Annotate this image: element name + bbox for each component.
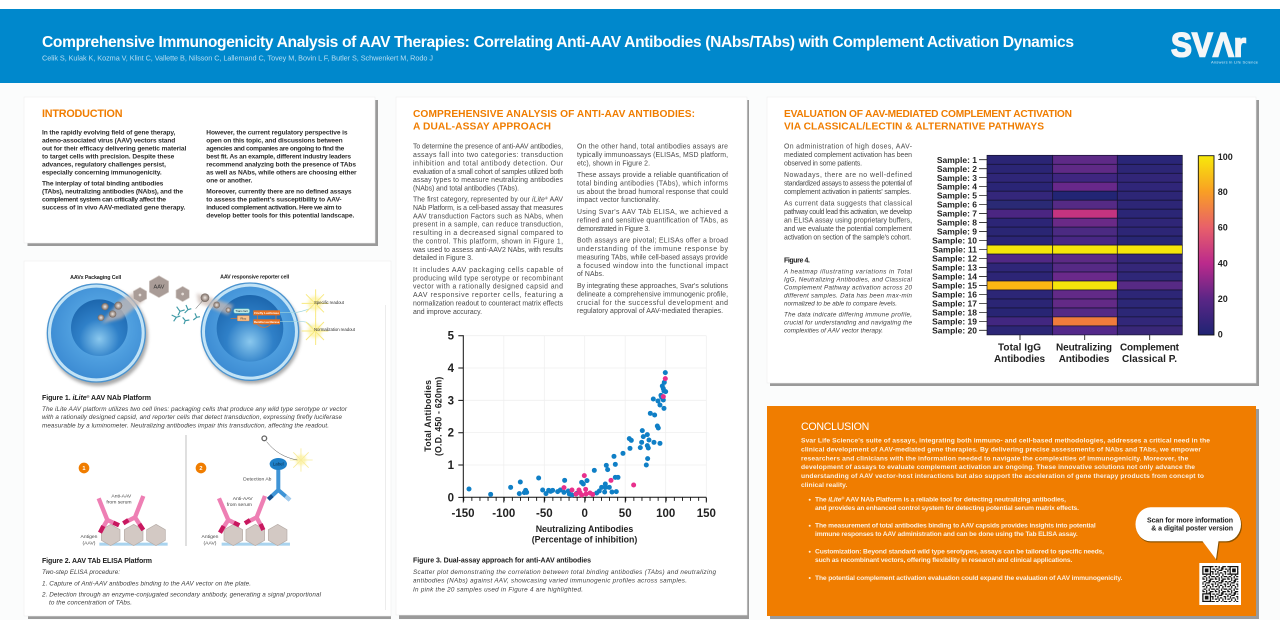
text block: introduction right column: Moreover, currently there are no defined assays: [206, 188, 352, 195]
text block: column 2: etc), shown in Figure 2.: [577, 160, 650, 168]
text block: column 1: NAb Platform, is a cell-based assay that measures: [413, 205, 564, 212]
text block: column 1: assays fall into two categories: transduction: [413, 152, 563, 159]
text block: complement activation: pathway could lead this activation, we develop: [784, 209, 912, 216]
text block: column 2: total binding antibodies (TAbs), which informs: [577, 180, 729, 188]
colour scale: 80: [1218, 187, 1228, 197]
text block: column 1: producing wild type serotype or recombinant: [413, 275, 563, 282]
reporter gene boxes: Trans fact: [235, 309, 248, 313]
heatmap column labels: [994, 343, 1180, 365]
figure 2 caption: Figure 2. AAV TAb ELISA Platform: [42, 558, 152, 565]
heading: complement activation: VIA CLASSICAL/LECTIN & ALTERNATIVE PATHWAYS: [784, 122, 1044, 133]
panel: conclusion: [767, 406, 1259, 619]
text block: introduction left column: success of in vivo AAV-mediated gene therapy.: [42, 204, 185, 211]
text block: column 1: normalization readout to counteract matrix effects: [413, 300, 564, 308]
bullet list: conclusion points: The iLite: [815, 497, 841, 504]
text block: introduction right column: recommend analyzing both the presence of TAbs: [206, 162, 356, 168]
step 1: capture: Antigen: [81, 534, 98, 540]
figure 2 caption: to the concentration of TAbs.: [49, 600, 132, 607]
text block: column 2: typically immunoassays (ELISAs, MSD platform,: [577, 152, 728, 159]
light readouts: Specific readout: [314, 300, 345, 305]
reporter gene boxes: Rluc: [240, 316, 247, 320]
heading: dual-assay approach: A DUAL-ASSAY APPROACH: [413, 122, 551, 132]
light readouts: [302, 289, 356, 345]
scatter tick labels: 50: [619, 508, 632, 520]
heatmap cells: [987, 155, 1182, 335]
heatmap sample labels: Sample: 11: [933, 245, 977, 255]
text block: column 2: impact vector functionality.: [577, 197, 660, 204]
text block: complement activation: observed in some patients.: [784, 160, 862, 168]
scatter tick labels: 3: [448, 395, 454, 407]
text block: column 1: was used to assess anti-AAV2 NAbs, with results: [412, 247, 564, 254]
scatter tick labels: 4: [448, 363, 455, 375]
bullet list: conclusion points: and provides an enhanced control system for detecting potential serum matrix effects.: [815, 505, 1079, 512]
figure 1 caption: AAV NAb Platform: [89, 395, 151, 402]
heatmap sample labels: Sample: 16: [932, 290, 977, 300]
scatter tick labels: [448, 331, 716, 520]
scatter points: [466, 370, 668, 497]
scatter tick labels: 0: [581, 508, 588, 520]
text block: column 2: measuring TAbs, while cell-based assays provide: [577, 254, 728, 262]
colour scale: 100: [1218, 152, 1233, 162]
bullet list: conclusion points: immune responses to AAV administration and can be done using the Tab ELISA assay.: [815, 531, 1078, 538]
text block: introduction right column: to assess the patient's susceptibility to AAV-: [206, 196, 342, 203]
text block: conclusion summary: Svar Life Science's suite of assays, integrating both immuno- and cell-based methodologies, addresses a critical need in the: [801, 438, 1210, 445]
figure 4 caption: different samples. Data has been max-min: [784, 292, 912, 299]
text block: column 1: and improve accuracy.: [413, 309, 482, 316]
text block: introduction left column: especially concerning immunogenicity.: [42, 170, 162, 176]
figure 2 caption: Two-step ELISA procedure:: [42, 569, 120, 576]
heading: complement activation: EVALUATION OF AAV-MEDIATED COMPLEMENT ACTIVATION: [784, 109, 1072, 120]
heatmap sample labels: Sample: 8: [937, 218, 977, 228]
text block: column 2: demonstrated in Figure 3.: [577, 226, 650, 233]
AAV vector particles travelling between cells: AAV: [154, 285, 165, 291]
text block: introduction left column: out for their efficacy delivering genetic material: [42, 146, 186, 152]
text block: column 1: inhibition and total antibody detection. Our: [413, 160, 564, 168]
text block: introduction right column: agencies and companies are ongoing to find the: [206, 146, 345, 152]
heatmap sample labels: Sample: 3: [937, 173, 977, 183]
panel: introduction: [24, 97, 378, 246]
text block: complement activation: As current data suggests that classical: [784, 201, 912, 208]
figure 2 illustration: AAV TAb ELISA platform: [79, 436, 313, 546]
heatmap sample labels: Sample: 15: [932, 280, 977, 290]
text block: introduction left column: adeno-associated virus (AAV) vectors stand: [42, 138, 175, 144]
text block: column 2: understanding of the immune response by: [577, 246, 729, 253]
scatter axes: [461, 335, 707, 500]
step 1: capture: [79, 463, 168, 546]
text block: conclusion summary: understanding of AAV vector-host interactions but also support the acceleration of gene therapy products from concept to: [801, 473, 1204, 480]
text block: complement activation: On administration of high doses, AAV-: [784, 144, 912, 150]
callout: scan for more information: & a digital poster version: [1151, 526, 1233, 533]
heatmap sample labels: Sample: 10: [932, 236, 977, 246]
text block: introduction right column: one or another.: [206, 178, 252, 184]
heatmap sample labels: Sample: 18: [932, 308, 977, 318]
text block: introduction right column: as well as NAbs, while others are choosing either: [206, 170, 357, 176]
heatmap sample labels: Sample: 5: [937, 191, 977, 201]
text block: column 1: evaluation of a small cohort of samples utilized both: [413, 169, 563, 176]
figure 3 caption: In pink the 20 samples used in Figure 4 are highlighted.: [413, 587, 583, 594]
heading: dual-assay approach: [413, 109, 695, 132]
heading: complement activation: [784, 109, 1072, 133]
text block: conclusion summary: development of assays to evaluate complement activation are ongoing. These innovative solutions not only advance the: [801, 464, 1195, 471]
text block: column 1: The first category, represented by our iLite: [413, 196, 545, 204]
bullet list: conclusion points: AAV NAb Platform is a reliable tool for detecting neutralizing antibodies,: [844, 497, 1066, 504]
AAV responsive reporter cell: AAV responsive reporter cell: [220, 274, 290, 280]
text block: complement activation: and we evaluate the potential complement: [784, 226, 912, 233]
figure 4 caption: Figure 4.: [784, 257, 810, 264]
heatmap sample labels: Sample: 6: [937, 200, 977, 210]
figure 1 caption: Figure 1. iLite: [42, 395, 87, 402]
text block: column 2: crucial for the successful development and: [577, 300, 728, 307]
colour scale: 20: [1218, 294, 1228, 304]
heatmap sample labels: Sample: 13: [932, 263, 977, 273]
text block: column 2: us about the broad humoral response that could: [577, 189, 728, 196]
text block: complement activation: an ELISA assay using proprietary buffers,: [784, 218, 912, 225]
reporter gene boxes: Renilla Luciferase: [254, 320, 280, 324]
figure 3 caption: Figure 3. Dual-assay approach for anti-AAV antibodies: [413, 558, 591, 565]
text block: introduction left column: (TAbs), neutralizing antibodies (NAbs), and the: [42, 188, 183, 195]
heatmap column labels: Antibodies: [994, 354, 1045, 365]
QR code: [1199, 563, 1241, 605]
heatmap column labels: Neutralizing: [1056, 343, 1112, 354]
heatmap sample labels: Sample: 1: [937, 155, 977, 165]
text block: introduction left column: to target cells with precision. Despite these: [42, 154, 175, 160]
text block: column 2: delineate a comprehensive immunogenic profile,: [577, 292, 728, 298]
heatmap column labels: Classical P.: [1122, 354, 1177, 365]
text block: conclusion summary: clinical development of AAV-mediated gene therapies. By delivering precise assessments of NAbs and TAbs, we empower: [801, 446, 1201, 454]
text block: complement activation: mediated complement activation has been: [784, 152, 912, 159]
text block: column 2: On the other hand, total antibodies assays are: [577, 144, 728, 150]
text block: column 1: the control. This platform, shown in Figure 1,: [413, 238, 563, 246]
heatmap sample labels: Sample: 2: [937, 164, 977, 174]
text block: column 1: assay types to measure neutralizing antibodies: [413, 177, 564, 184]
step 2: detection: Anti-AAV: [233, 496, 253, 502]
logo: Svar: SVΛr: [1171, 26, 1246, 64]
text block: column 2: Using Svar's AAV TAb ELISA, we achieved a: [577, 209, 728, 216]
panel: figures 1 and 2: [24, 261, 391, 619]
figure 4 caption: complexities of AAV vector therapy.: [784, 327, 883, 334]
text block: introduction left column: complement system can critically affect the: [42, 196, 166, 203]
figure 3 caption: antibodies (NAbs) against AAV, showcasing varied immunogenic profiles across samples.: [413, 578, 687, 585]
scatter tick labels: 0: [448, 492, 454, 504]
text block: column 1: (NAbs) and total antibodies (TAbs).: [413, 186, 519, 192]
text block: column 2: a focused window into the functional impact: [577, 263, 728, 270]
scatter axis titles: Neutralizing Antibodies: [536, 524, 633, 534]
colour scale: 60: [1218, 223, 1228, 233]
text block: column 1: [412, 144, 564, 316]
text block: column 1: present in a sample, can reduce transduction,: [413, 222, 563, 229]
heatmap sample labels: Sample: 20: [932, 325, 977, 335]
figure 1 caption: [42, 394, 348, 430]
step 1: capture: Anti-AAV: [111, 493, 132, 499]
text block: complement activation: Nowadays, there are no well-defined: [784, 172, 912, 179]
step 1: capture: (AAV): [83, 540, 96, 546]
figure 1 caption: The iLite AAV platform utilizes two cell lines: packaging cells that produce any wild type serotype or vector: [42, 406, 348, 413]
colour scale: 0: [1218, 330, 1223, 340]
heatmap sample labels: [932, 155, 977, 335]
text block: conclusion summary: researchers and clinicians with the information needed to navigate the complexities of immunogenicity. Moreover, the: [801, 455, 1189, 462]
text block: conclusion summary: [801, 438, 1210, 489]
scatter tick labels: 100: [656, 508, 675, 520]
step 2: detection: 2: [199, 466, 203, 472]
text block: column 1: detailed in Figure 3.: [413, 255, 473, 262]
text block: column 1: vector with a rationally designed capsid and: [413, 284, 563, 291]
figure 4 caption: [783, 257, 913, 334]
bullet list: conclusion points: [809, 496, 1122, 582]
scatter axis titles: Total Antibodies: [423, 380, 433, 452]
bullet list: conclusion points: ®: [841, 496, 844, 501]
text block: conclusion summary: clinical reality.: [801, 482, 847, 489]
colour scale: 40: [1218, 258, 1228, 268]
text block: column 2: regulatory approval of AAV-mediated therapies.: [577, 308, 723, 315]
step 2: detection: [196, 436, 313, 546]
text block: introduction right column: develop better tools for this potential landscape.: [206, 212, 354, 219]
bullet list: conclusion points: The measurement of total antibodies binding to AAV capsids provides insights into potential: [815, 523, 1096, 530]
heatmap sample labels: Sample: 7: [937, 209, 977, 219]
bullet list: conclusion points: The potential complement activation evaluation could expand the evaluation of AAV immunogenicity.: [815, 575, 1122, 582]
text block: column 2: Both assays are pivotal; ELISAs offer a broad: [577, 238, 728, 245]
text block: complement activation: activation on section of the sample's cohort.: [784, 234, 911, 241]
header band: [0, 9, 1280, 83]
text block: column 1: resulting in a decreased signal compared to: [413, 230, 563, 237]
text block: introduction left column: [42, 130, 186, 211]
scatter tick labels: 5: [448, 331, 455, 343]
reporter gene boxes: Firefly Luciferase: [254, 311, 279, 315]
bullet list: conclusion points: Customization: Beyond standard wild type serotypes, assays can be tailored to specific needs,: [815, 549, 1104, 556]
AAV vector particles travelling between cells: [98, 276, 233, 323]
scatter axis titles: [423, 377, 637, 545]
panel: complement activation: [767, 97, 1259, 386]
text block: column 1: AAV responsive reporter cells, featuring a: [413, 292, 563, 299]
reporter gene boxes: [231, 308, 313, 328]
scatter tick labels: -100: [492, 508, 515, 520]
authors: Celik S, Kulak K, Kozma V, Klint C, Vallette B, Nilsson C, Lallemand C, Tovey M, Bovin L F, Butler S, Schwenkert M, Rodo J: [42, 54, 433, 62]
figure 4 caption: The data indicate differing immune profile,: [784, 311, 912, 318]
figure 2 caption: [41, 558, 322, 607]
figure 2 caption: 1. Capture of Anti-AAV antibodies binding to the AAV vector on the plate.: [42, 580, 251, 587]
text block: column 1: To determine the presence of anti-AAV antibodies,: [413, 144, 563, 150]
figure 4 caption: Complement Pathway activation across 20: [784, 284, 912, 291]
AAVx packaging cell: AAVx Packaging Cell: [70, 275, 122, 281]
text block: complement activation: complement activation in patients' samples.: [784, 189, 911, 196]
figure 4 caption: A heatmap illustrating variations in Total: [783, 268, 913, 275]
light readouts: Normalization readout: [314, 327, 356, 332]
figure 1 caption: measurable by a luminometer. Neutralizing antibodies impair this transduction, affecting the readout.: [42, 422, 329, 430]
colour scale: [1198, 152, 1233, 340]
text block: column 1: ®: [545, 196, 548, 200]
text block: column 2: of NAbs.: [577, 271, 604, 278]
text block: introduction right column: However, the current regulatory perspective is: [206, 130, 348, 136]
scatter tick labels: 150: [697, 508, 716, 520]
text block: introduction left column: The interplay of total binding antibodies: [42, 180, 164, 187]
AAVx packaging cell: [47, 275, 148, 386]
heatmap column labels: Total IgG: [998, 343, 1041, 354]
panel: comprehensive analysis: [396, 97, 749, 619]
scatter axis titles: (Percentage of inhibition): [532, 535, 637, 545]
AAV responsive reporter cell: [201, 274, 301, 384]
heatmap column labels: Antibodies: [1059, 354, 1110, 365]
heatmap sample labels: Sample: 19: [932, 316, 977, 326]
figure 1 caption: ®: [87, 394, 90, 399]
heading: dual-assay approach: COMPREHENSIVE ANALYSIS OF ANTI-AAV ANTIBODIES:: [413, 109, 695, 120]
step 2: detection: Antigen: [202, 534, 219, 540]
text block: introduction right column: [206, 130, 357, 219]
text block: column 2: By integrating these approaches, Svar's solutions: [577, 283, 729, 290]
figure 3 caption: Scatter plot demonstrating the correlation between total binding antibodies (TAbs) and neutralizing: [413, 569, 716, 576]
figure 1 illustration: iLite AAV NAb platform: [47, 274, 356, 386]
scatter tick labels: -50: [536, 508, 553, 520]
step 2: detection: from serum: [227, 502, 252, 508]
text block: introduction right column: best fit. As an example, different industry leaders: [206, 154, 351, 160]
text block: introduction left column: advances, regulatory challenges persist,: [42, 162, 166, 168]
heatmap sample labels: Sample: 17: [932, 298, 977, 308]
figure 4 caption: IgG, Neutralizing Antibodies, and Classical: [784, 276, 913, 283]
figure 1 caption: with a rationally designed capsid, and reporter cells that detect transduction, expressing firefly luciferase: [42, 414, 342, 421]
text block: complement activation: [784, 144, 912, 241]
callout: scan for more information: Scan for more information: [1147, 518, 1233, 525]
neutralizing antibodies: [172, 305, 200, 324]
text block: introduction right column: open on this topic, and discussions between: [206, 138, 343, 144]
scatter axis titles: (O.D. 450 - 620nm): [434, 377, 444, 456]
step 1: capture: from serum: [106, 500, 132, 506]
heatmap sample labels: Sample: 14: [932, 272, 977, 282]
scatter tick labels: 2: [448, 428, 454, 440]
figure 3 caption: [413, 558, 716, 594]
text block: column 2: [577, 144, 729, 315]
bullet list: conclusion points: such as recombinant vectors, offering flexibility in research and clinical applications.: [815, 557, 1072, 564]
heatmap sample labels: Sample: 12: [932, 254, 977, 264]
figure 2 caption: 2. Detection through an enzyme-conjugated secondary antibody, generating a signal proportional: [41, 592, 322, 599]
text block: column 1: AAV: [548, 196, 563, 204]
text block: introduction right column: induced complement activation. Here we aim to: [206, 204, 342, 211]
text block: column 2: refined and sensitive quantification of TAbs, as: [577, 218, 729, 224]
figure 4 caption: normalized to be able to compare levels.: [784, 300, 897, 307]
scatter tick labels: 1: [448, 460, 455, 472]
step 2: detection: (AAV): [204, 540, 217, 546]
callout: scan for more information: [1136, 507, 1242, 560]
heatmap sample labels: Sample: 9: [937, 227, 977, 237]
text block: column 1: AAV transduction Factors such as NAbs, when: [413, 213, 563, 220]
text block: column 1: It includes AAV packaging cells capable of: [413, 267, 563, 274]
heading: conclusion: CONCLUSION: [801, 421, 869, 433]
heading: introduction: INTRODUCTION: [42, 108, 123, 120]
scatter plot: total vs neutralizing antibodies: [423, 331, 716, 545]
step 1: capture: 1: [82, 466, 86, 472]
heatmap: samples by antibody type: [932, 152, 1233, 365]
title: Comprehensive Immunogenicity Analysis of AAV Therapies: Correlating Anti-AAV Antibodies (NAbs/TAbs) with Complement Activation Dynamics: [42, 34, 1074, 51]
step 2: detection: Label: [273, 462, 284, 467]
heatmap sample labels: Sample: 4: [937, 182, 977, 192]
scatter tick labels: -150: [451, 508, 475, 520]
logo: Svar: Answers in Life Science: [1211, 60, 1259, 64]
step 2: detection: Detection Ab: [243, 477, 272, 483]
figure 4 caption: crucial for understanding and navigating the: [784, 319, 912, 326]
text block: complement activation: standardized assays to assess the potential of: [784, 180, 912, 188]
text block: column 2: These assays provide a reliable quantification of: [577, 172, 728, 179]
text block: introduction left column: In the rapidly evolving field of gene therapy,: [42, 130, 175, 136]
heatmap column labels: Complement: [1120, 343, 1180, 354]
